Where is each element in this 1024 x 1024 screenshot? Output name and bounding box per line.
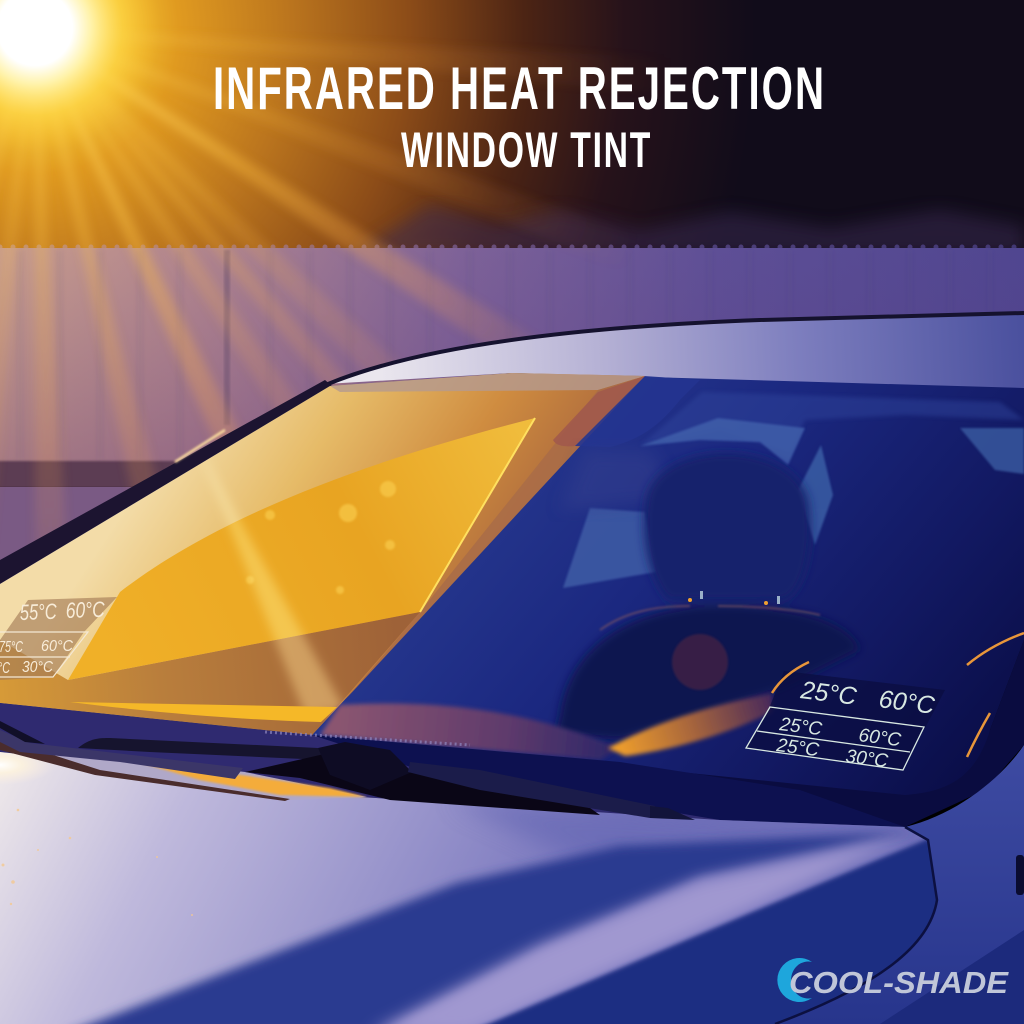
temperature decal: left amber side: 75°C (0, 639, 23, 656)
amber spots (246, 481, 396, 594)
dashboard reflection (320, 693, 772, 760)
interior: ghost reflection on glass (560, 450, 680, 510)
amber sunlit panel (68, 418, 535, 680)
car roof (325, 313, 1024, 390)
amber top strip and rust band (330, 373, 645, 700)
windshield pillar (0, 380, 332, 584)
temperature decal: right blue side: 30°C (844, 746, 889, 772)
amber dash strips (70, 702, 337, 722)
cowl base under windshield (0, 640, 1024, 827)
hood lower dark panel (465, 838, 945, 1024)
rearview mirror (553, 376, 700, 447)
sunlit panel yellow edge (420, 418, 535, 612)
temperature decal: right blue side: 25°C (774, 735, 820, 761)
defrost vent dashes (265, 732, 470, 745)
temperature decal: left amber side: 60°C (65, 597, 105, 623)
windshield: blue tinted side (0, 373, 1024, 795)
hood bright stripe (370, 834, 915, 1024)
temperature decal: left amber side: 60°C (41, 638, 73, 655)
amber lower dash shadow (0, 612, 420, 735)
temperature decal: left amber side: 30°C (22, 659, 53, 676)
hood dark band (65, 832, 915, 1024)
hood right upper fade (468, 806, 902, 853)
background: distant tree line (360, 205, 1024, 255)
background: sunset sky (0, 0, 1024, 260)
lavender strip and amber reflection on hood edge (0, 738, 367, 801)
temperature decal: right blue side: 25°C (798, 676, 859, 711)
hood sparkles (2, 809, 193, 916)
logo: Cool-Shade: COOL-SHADE (789, 965, 1009, 1000)
temperature decal: right blue side: 60°C (877, 685, 937, 720)
right glass edge highlights (772, 633, 1024, 757)
right fender (775, 745, 1024, 1024)
windshield: amber untreated side (0, 373, 645, 735)
temperature decal: right blue side: 60°C (857, 725, 902, 751)
sun beam across amber glass (210, 474, 344, 717)
fender seam (775, 827, 937, 1024)
interior: headrest posts and seat top glints (600, 591, 820, 630)
cowl panel (0, 703, 905, 827)
interior: rear window reflections (563, 392, 1024, 588)
car hood (0, 745, 945, 1024)
background: dark hedge and ground (0, 461, 400, 587)
interior: seat and headrest (555, 453, 860, 740)
windshield wiper assembly (0, 721, 695, 820)
temperature decal: right blue side: 25°C (777, 714, 823, 740)
interior: steering wheel glow (672, 634, 728, 690)
temperature decal: right blue side (746, 671, 945, 772)
hood highlight glow (0, 752, 42, 778)
sun glow (0, 0, 160, 153)
subtitle: WINDOW TINT (401, 122, 652, 178)
background: corrugated fence (0, 247, 1024, 463)
temperature decal: left amber side (0, 597, 117, 680)
cowl blue shade (312, 735, 905, 827)
temperature decal: left amber side: 55°C (19, 599, 57, 625)
sun rays over background (0, 43, 602, 540)
